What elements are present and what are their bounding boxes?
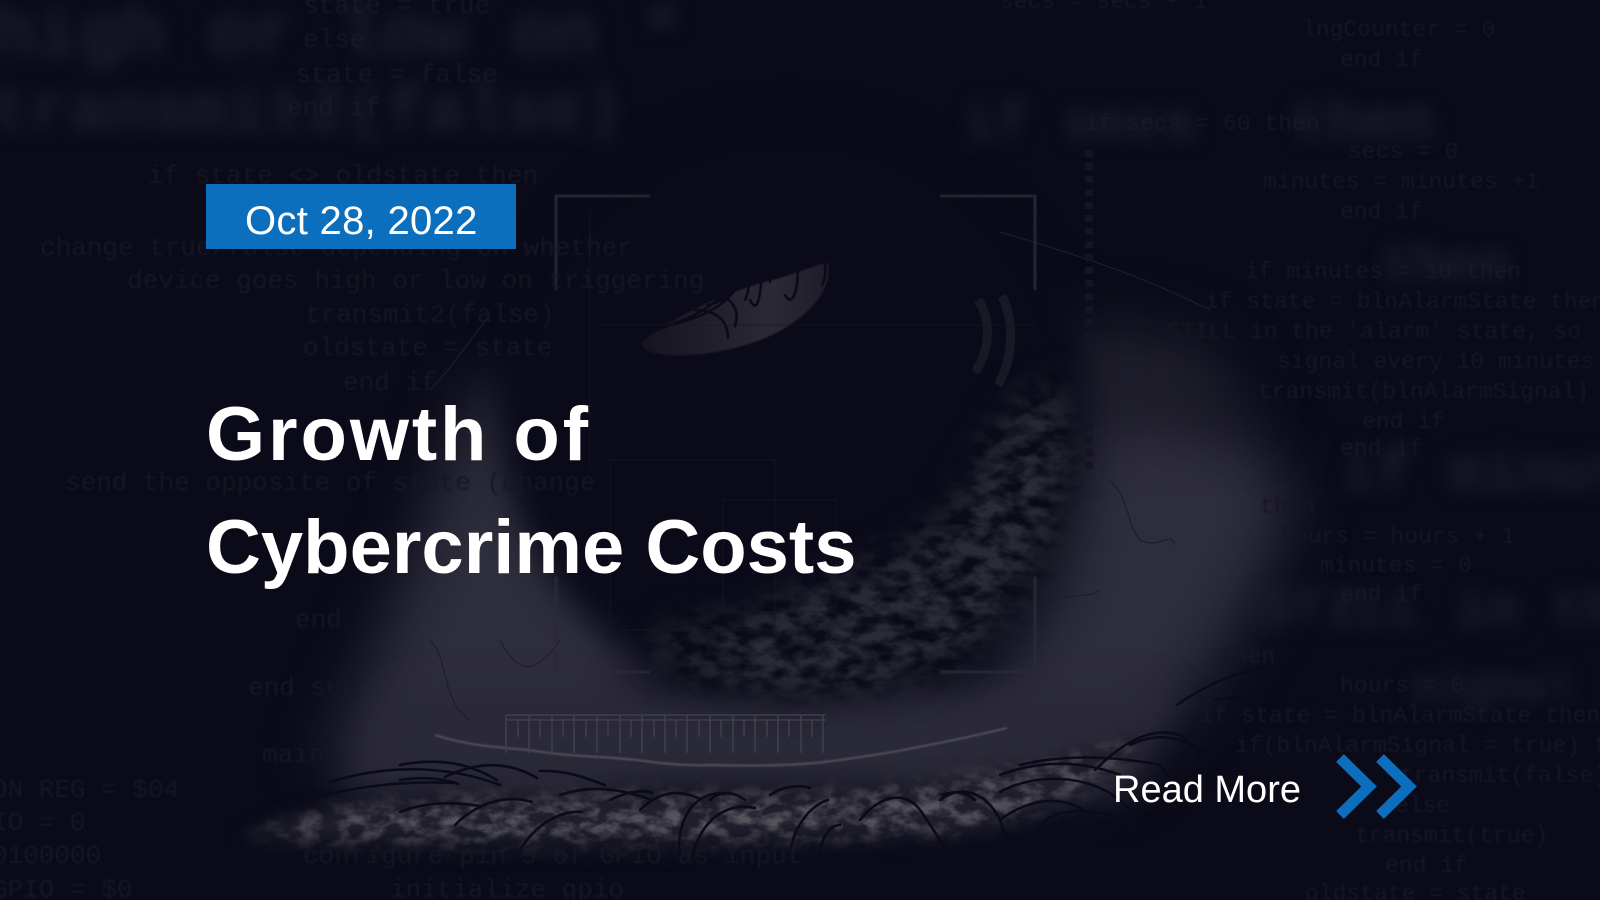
lower lashes	[230, 732, 1250, 890]
background code: right: then	[1260, 494, 1315, 520]
background code: left: change true/false depending on whether	[40, 233, 633, 263]
title: Growth of	[206, 392, 591, 477]
background code: left: state = false	[295, 60, 498, 90]
iris fibres	[640, 380, 1068, 697]
lid skin base	[240, 730, 1150, 851]
background code: right: end if	[1340, 47, 1423, 73]
blurred foreground code: then	[1290, 91, 1434, 159]
background code: right: hours = hours + 1	[1280, 524, 1515, 550]
background code: left	[0, 0, 802, 900]
background code: right: end if	[1340, 582, 1423, 608]
sclera upper right fade	[1060, 320, 1260, 430]
background code: right: signal every 10 minutes	[1277, 349, 1594, 375]
background code: right: minutes = 0	[1320, 553, 1472, 579]
read more link	[1113, 758, 1409, 815]
read more label: Read More	[1113, 769, 1301, 811]
lower shadow	[0, 825, 1600, 870]
iris	[498, 116, 1082, 700]
background code: right: end if	[1385, 853, 1468, 879]
lid skin texture	[250, 740, 1140, 849]
iris rim bands	[975, 296, 1011, 385]
background code: left: if state <> oldstate then	[148, 161, 538, 191]
sclera bottom	[340, 690, 1170, 790]
background code: right: transmit(true)	[1355, 823, 1548, 849]
lid streaks	[430, 232, 1210, 390]
background code: left: end sub	[248, 673, 357, 703]
blurred foreground code: if secs	[962, 93, 1197, 157]
blurred foreground code: transmit2(false)	[0, 75, 624, 150]
background code: left: end	[295, 605, 342, 635]
background code: left: end if	[287, 93, 381, 123]
background code: right: if state = blnAlarmState then	[1205, 289, 1600, 315]
background code: right: transmit(blnAlarmSignal)	[1258, 379, 1589, 405]
background code: left: transmit2(false)	[305, 300, 555, 330]
background code: left: device goes high or low on triggering	[127, 266, 704, 296]
background code: right	[1000, 0, 1600, 900]
pupil reflection	[642, 262, 829, 356]
sclera left	[320, 380, 660, 800]
sclera veins	[430, 480, 1175, 720]
icon: double chevron arrow	[1340, 758, 1409, 815]
background code: left: else	[303, 25, 365, 55]
background code: right: end if	[1340, 199, 1423, 225]
HUD ruler	[506, 715, 826, 753]
background code: right: if minutes = 10 then	[1245, 259, 1521, 285]
tear line	[435, 728, 1007, 766]
far lashes	[1177, 663, 1415, 740]
background code: left: end if	[343, 368, 437, 398]
background code: right: lngCounter = 0	[1302, 17, 1495, 43]
background code: right: hours = 0	[1340, 673, 1464, 699]
background code: right: STILL in the 'alarm' state, so	[1167, 319, 1581, 345]
blurred foreground code: signal	[1410, 662, 1576, 714]
background code: right: end if	[1362, 409, 1445, 435]
blurred foreground code	[0, 0, 1600, 714]
background code: left: oldstate = state	[303, 333, 553, 363]
blurred foreground code: then	[1380, 236, 1510, 297]
date badge	[206, 184, 516, 249]
background code: left: send the opposite of state (change	[65, 468, 596, 498]
title: Cybercrime Costs	[206, 505, 856, 590]
upper lashes	[650, 254, 825, 338]
background code: left: main:	[262, 740, 340, 770]
background code: right: else	[1395, 793, 1450, 819]
background code: right: then	[1220, 644, 1275, 670]
background code: right: end if	[1340, 436, 1423, 462]
background code: right: minutes = minutes +1	[1263, 169, 1539, 195]
sclera right	[900, 390, 1290, 800]
date badge: Oct 28, 2022	[245, 199, 478, 243]
dotted vertical strip	[1085, 150, 1093, 470]
background code: right: secs = 0	[1348, 139, 1458, 165]
background code: right: if secs = 60 then	[1085, 111, 1320, 137]
background code: right: if state = blnAlarmState then	[1200, 703, 1600, 729]
title	[206, 392, 856, 590]
background code: left: configure pin 5 of GPIO as input	[303, 841, 802, 871]
HUD overlay: corner brackets and grids	[556, 196, 1035, 672]
